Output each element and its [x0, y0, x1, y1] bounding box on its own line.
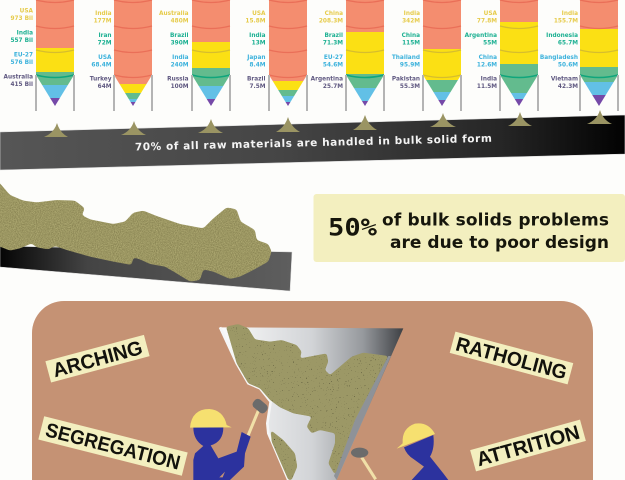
silo 5 with labels: China	[325, 11, 343, 17]
silo 8 with labels: 65.7M	[558, 40, 578, 46]
silo 6 with labels: 95.9M	[400, 62, 420, 68]
silo 1 with labels: India	[17, 30, 33, 36]
label: attrition: ATTRITION	[474, 422, 582, 471]
callout figure: 50%	[328, 214, 378, 242]
callout text second line: are due to poor design	[390, 233, 609, 253]
silo 8 with labels: 50.6M	[558, 62, 578, 68]
silo 2 with labels: USA	[98, 55, 112, 61]
silo 4 with labels	[245, 0, 307, 111]
silo 1 with labels: 415 Bil	[10, 82, 33, 88]
silo 3 with labels: 100M	[171, 84, 189, 90]
label: ratholing: RATHOLING	[453, 334, 569, 384]
spilled bulk material	[0, 177, 272, 282]
silo 7 with labels: China	[479, 55, 497, 61]
conveyor belt with banner text	[0, 115, 625, 170]
silo 7 with labels: 55M	[483, 40, 497, 46]
silo 8 with labels: Vietnam	[551, 76, 578, 82]
silo 5 with labels: 25.7M	[323, 84, 343, 90]
silo 1 with labels	[4, 0, 74, 111]
silo 5 with labels: EU-27	[324, 55, 343, 61]
silo 5 with labels: Argentina	[311, 76, 343, 82]
silo 3 with labels: 240M	[171, 62, 189, 68]
silo 8 with labels	[540, 0, 618, 111]
silo 4 with labels: Brazil	[247, 76, 266, 82]
silo 5 with labels: 71.3M	[323, 40, 343, 46]
silo 6 with labels	[392, 0, 461, 111]
silo 7 with labels: USA	[484, 11, 497, 17]
silo 4 with labels: 8.4M	[249, 62, 266, 68]
silo 8 with labels: India	[562, 11, 578, 17]
silo 4 with labels: Japan	[247, 55, 266, 61]
silo 2 with labels: 177M	[94, 18, 112, 24]
silo 8 with labels: Bangladesh	[540, 55, 578, 61]
silo 7 with labels: 11.5M	[477, 84, 497, 90]
panel: bulk solids problems	[32, 301, 593, 480]
callout text: of bulk solids problems	[382, 210, 609, 230]
silo 2 with labels: 68.4M	[91, 62, 112, 68]
silo 8 with labels: Indonesia	[546, 33, 578, 39]
silo 6 with labels: 55.3M	[400, 84, 420, 90]
worker left with hammer	[190, 397, 269, 480]
silo 5 with labels: Brazil	[324, 33, 343, 39]
silo 4 with labels: India	[249, 33, 266, 39]
callout: 50% of bulk solids problems	[314, 194, 625, 262]
silo 6 with labels: 342M	[402, 18, 420, 24]
silo 2 with labels: 64M	[98, 84, 112, 90]
silo 4 with labels: 7.5M	[249, 84, 266, 90]
silo 3 with labels: 390M	[171, 40, 189, 46]
silo 4 with labels: 13M	[252, 40, 266, 46]
silo 1 with labels: 973 Bil	[10, 16, 33, 22]
silo 8 with labels: 155.7M	[554, 18, 578, 24]
silo 5 with labels	[311, 0, 384, 111]
lower belt with spilled material	[0, 177, 292, 291]
silo 7 with labels	[465, 0, 538, 111]
silo 3 with labels: Russia	[167, 76, 188, 82]
silo 5 with labels: 208.3M	[319, 18, 343, 24]
silo 1 with labels: EU-27	[14, 52, 33, 58]
worker right with hammer	[351, 423, 448, 480]
silo 3 with labels: 480M	[171, 18, 189, 24]
silo 1 with labels: Australia	[4, 74, 33, 80]
label: segregation: SEGREGATION	[43, 419, 182, 475]
label: arching: ARCHING	[50, 337, 145, 382]
banner text: 70% of all raw materials are handled in bulk solid form	[135, 133, 492, 153]
silo 2 with labels	[90, 0, 152, 111]
silo 6 with labels: Pakistan	[392, 76, 420, 82]
silo 4 with labels: 15.8M	[245, 18, 266, 24]
silo 2 with labels: India	[95, 11, 112, 17]
silo 6 with labels: India	[404, 11, 420, 17]
silo 7 with labels: Argentina	[465, 33, 497, 39]
silo 3 with labels	[159, 0, 230, 111]
silo 6 with labels: 115M	[402, 40, 420, 46]
silo 6 with labels: Thailand	[392, 55, 420, 61]
silo 7 with labels: India	[481, 76, 497, 82]
silo 1 with labels: 557 Bil	[10, 38, 33, 44]
silo 1 with labels: USA	[20, 8, 33, 14]
hopper funnel	[220, 324, 403, 480]
silo 4 with labels: USA	[252, 11, 266, 17]
silo 7 with labels: 12.6M	[477, 62, 497, 68]
silo 2 with labels: Iran	[98, 33, 112, 39]
silo 3 with labels: India	[172, 55, 188, 61]
silo 6 with labels: China	[402, 33, 420, 39]
silo 2 with labels: Turkey	[90, 76, 112, 82]
silo 8 with labels: 42.3M	[558, 84, 578, 90]
silo 3 with labels: Brazil	[170, 33, 188, 39]
silo 2 with labels: 72M	[98, 40, 112, 46]
silo 3 with labels: Australia	[159, 11, 188, 17]
silo 1 with labels: 576 Bil	[10, 60, 33, 66]
silo 7 with labels: 77.8M	[477, 18, 497, 24]
material piles on the belt	[44, 110, 612, 137]
silo 5 with labels: 54.6M	[323, 62, 343, 68]
